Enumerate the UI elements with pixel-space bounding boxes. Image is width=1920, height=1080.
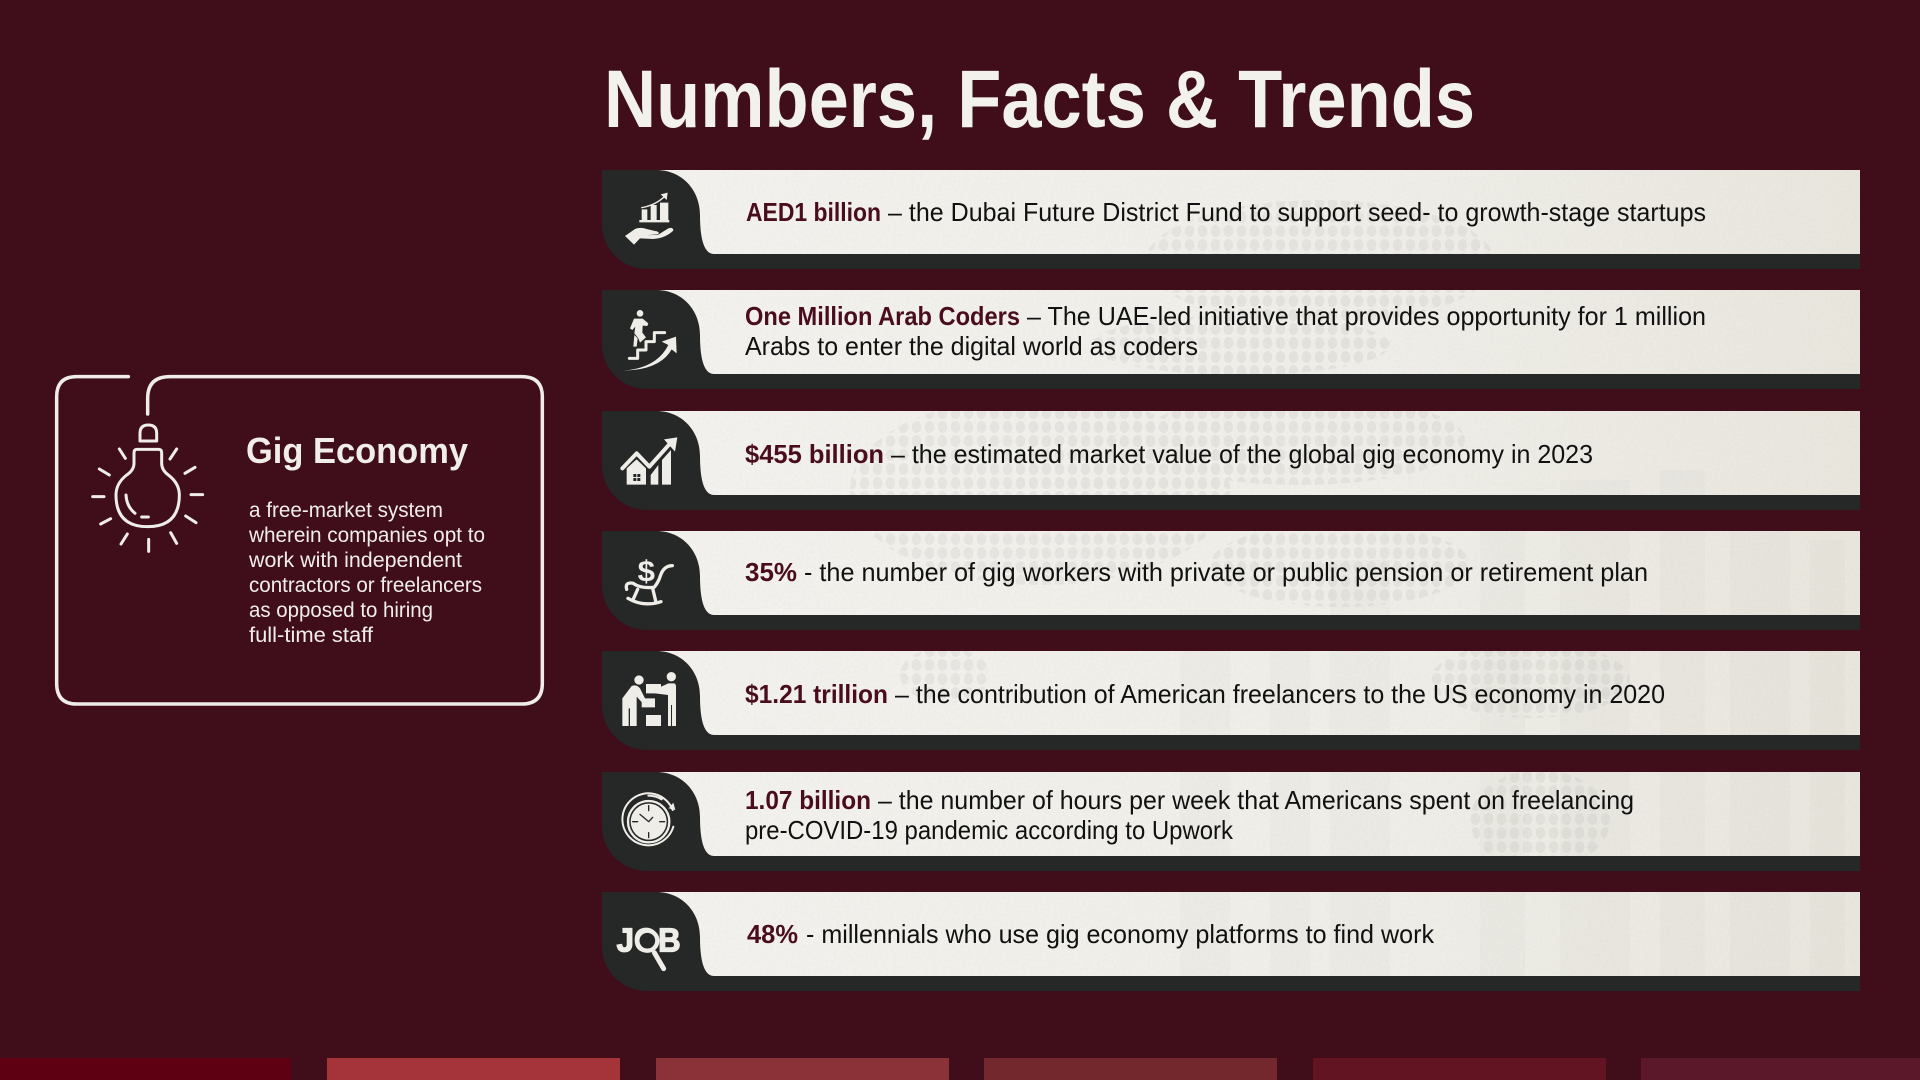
icon: two people exchanging boxes <box>622 672 676 726</box>
icon: rocking chair with dollar sign: $ <box>638 555 655 588</box>
fact text: – the number of hours per week that Americans spent on freelancing <box>878 785 1634 815</box>
fact text: – the Dubai Future District Fund to support seed- to growth-stage startups <box>888 197 1706 227</box>
icon: clock with circular arrow <box>622 793 675 845</box>
fact text: One Million Arab Coders <box>745 301 1020 331</box>
bottom colour strip <box>0 1058 1920 1080</box>
fact text: – the contribution of American freelancers to the US economy in 2020 <box>895 679 1665 709</box>
icon: rocking chair with dollar sign <box>626 555 672 604</box>
panel: $1.21 trillion fact <box>602 651 1860 750</box>
panel: gig economy definition <box>57 377 542 704</box>
panel heading: Gig Economy <box>246 430 468 471</box>
fact text: - the number of gig workers with private or public pension or retirement plan <box>804 557 1648 587</box>
panel description: a free-market system <box>249 499 443 522</box>
panel description <box>248 499 485 647</box>
light bulb frame and icon <box>57 377 542 704</box>
fact text: 1.07 billion <box>745 785 871 815</box>
panel description: full-time staff <box>249 624 373 647</box>
icon: person climbing stairs <box>623 310 677 371</box>
panel: 1.07 billion fact <box>602 772 1860 871</box>
fact text: – the estimated market value of the global gig economy in 2023 <box>891 439 1593 469</box>
fact text: pre-COVID-19 pandemic according to Upwork <box>745 815 1234 845</box>
icon: JOB with magnifier: JOB <box>617 923 681 960</box>
panel description: as opposed to hiring <box>249 599 433 622</box>
fact text: $455 billion <box>745 439 884 469</box>
fact text <box>745 301 1706 361</box>
icon: house and rising chart <box>622 437 677 485</box>
icon: hand holding growth chart <box>625 193 673 245</box>
title: Numbers, Facts & Trends <box>604 54 1475 145</box>
panel: 35% fact <box>602 531 1860 630</box>
panel: 48% fact <box>602 892 1860 991</box>
fact text: $1.21 trillion <box>745 679 888 709</box>
fact text: 35% <box>745 557 797 587</box>
fact text: 48% <box>747 919 798 949</box>
fact text: - millennials who use gig economy platforms to find work <box>806 919 1435 949</box>
panel: $455 billion fact <box>602 411 1860 510</box>
fact text: – The UAE-led initiative that provides opportunity for 1 million <box>1027 301 1706 331</box>
fact text: AED1 billion <box>746 197 881 227</box>
panel description: wherein companies opt to <box>248 524 485 547</box>
fact text: Arabs to enter the digital world as coders <box>745 331 1198 361</box>
panel description: work with independent <box>248 549 462 572</box>
panel: One Million Arab Coders fact <box>602 290 1860 389</box>
panel description: contractors or freelancers <box>249 574 482 597</box>
panel: AED1 billion fact <box>602 170 1860 269</box>
fact text <box>745 785 1634 845</box>
